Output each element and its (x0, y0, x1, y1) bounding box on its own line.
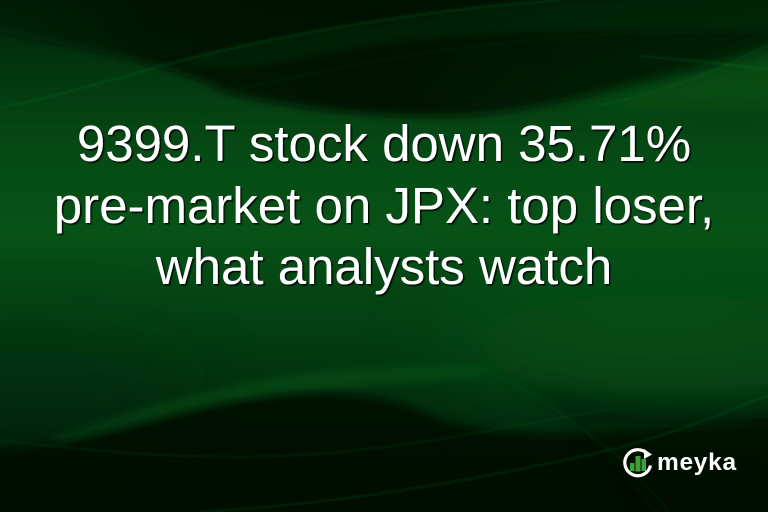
wordmark: meyka (657, 449, 737, 476)
title: 9399.T stock down 35.71% (77, 115, 691, 172)
title: what analysts watch (155, 238, 612, 295)
title: pre-market on JPX: top loser, (54, 177, 714, 234)
icon: circular arrow with bars (625, 449, 652, 476)
logo: meyka (625, 449, 737, 476)
